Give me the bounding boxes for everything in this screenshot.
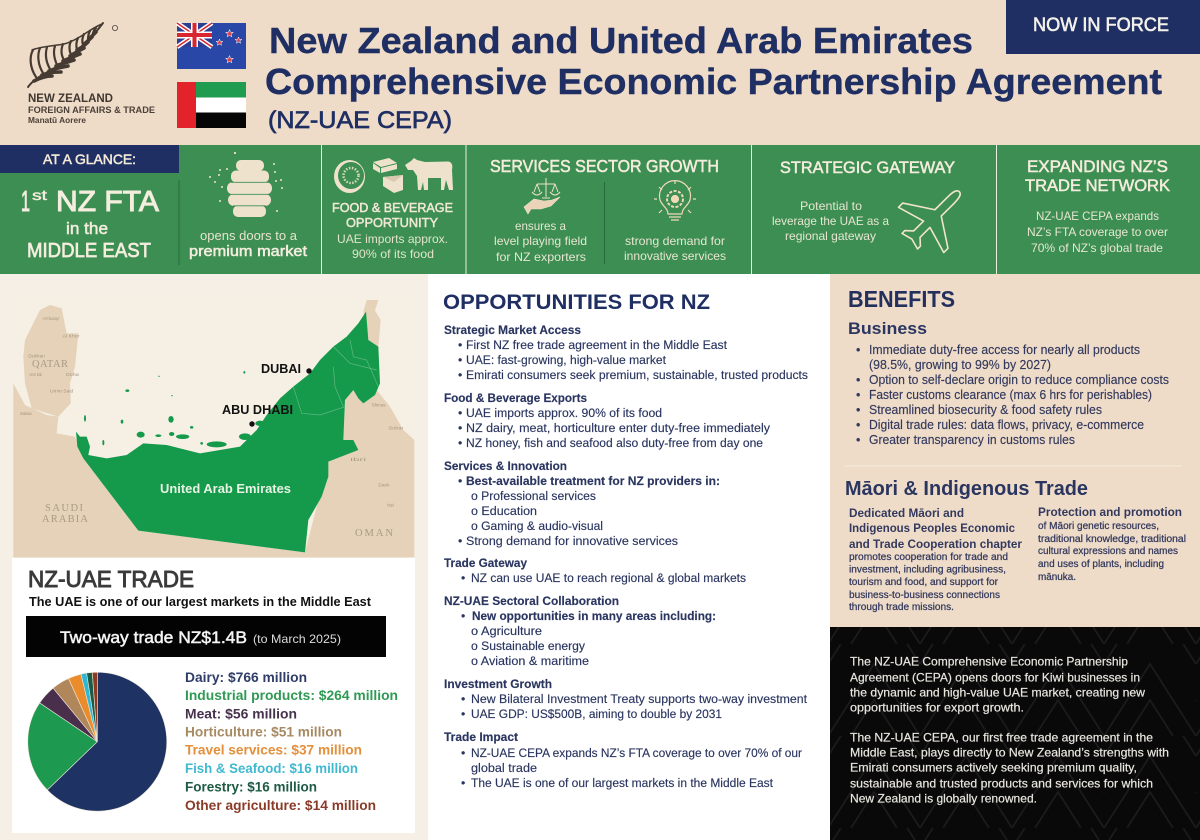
map of UAE: Umm Bab	[29, 372, 42, 378]
map of UAE: Dank	[378, 483, 390, 489]
list: business benefits: Option to self-declare origin to reduce compliance costs	[869, 373, 1169, 387]
country label: Saudi Arabia	[42, 503, 88, 525]
two-way trade figure	[26, 616, 386, 657]
section: investment growth: New Bilateral Investment Treaty supports two-way investment	[471, 692, 808, 706]
section: trade gateway: •	[461, 571, 465, 585]
city: Abu Dhabi: ABU DHABI	[222, 403, 293, 417]
heading: OPPORTUNITIES FOR NZ	[443, 290, 710, 314]
item: strategic gateway: STRATEGIC GATEWAY	[780, 158, 955, 177]
icon: cow	[405, 158, 453, 190]
text: dedicated chapter: Indigenous Peoples Economic	[849, 521, 1015, 535]
stat: 1st NZ FTA in the Middle East: MIDDLE EAST	[27, 240, 151, 262]
summary text: The NZ-UAE CEPA, our first free trade agreement in the	[850, 730, 1153, 744]
section: strategic market access: Emirati consumers seek premium, sustainable, trusted products	[466, 368, 808, 382]
item: expanding trade network: NZ’s FTA coverage to over	[1027, 225, 1168, 239]
icon: UAE flag	[177, 82, 246, 128]
list: business benefits: Greater transparency in customs rules	[869, 433, 1075, 447]
section: services and innovation: o Education	[471, 504, 537, 518]
subheading: The UAE is one of our largest markets in the Middle East	[29, 595, 372, 609]
item: services sector growth: SERVICES SECTOR GROWTH	[490, 156, 719, 176]
icon: kiwi fruit	[334, 160, 365, 193]
section: strategic market access: First NZ free trade agreement in the Middle East	[466, 338, 728, 352]
map of UAE: Shinas	[372, 403, 386, 409]
map of UAE: Dukhan	[28, 353, 45, 359]
section: sectoral collaboration: New opportunities in many areas including:	[472, 609, 716, 623]
logo: NZ Foreign Affairs & Trade: FOREIGN AFFAIRS & TRADE	[28, 105, 155, 116]
section: investment growth: UAE GDP: US$500B, aiming to double by 2031	[471, 707, 722, 721]
title: New Zealand and United Arab Emirates	[269, 20, 973, 61]
list: business benefits: Immediate duty-free access for nearly all products	[869, 343, 1140, 357]
two-way trade figure: (to March 2025)	[253, 632, 341, 646]
panel: benefits	[830, 274, 1200, 627]
chart legend: Industrial products: $264 million	[185, 687, 398, 703]
section: sectoral collaboration: o Sustainable energy	[471, 639, 586, 653]
item: expanding trade network: TRADE NETWORK	[1025, 176, 1171, 195]
section: trade gateway: Trade Gateway	[444, 556, 527, 570]
list: business benefits: •	[856, 433, 860, 447]
badge: now in force: NOW IN FORCE	[1033, 15, 1169, 36]
icon: light bulb with gear	[654, 181, 696, 220]
section: food and beverage exports: •	[458, 421, 462, 435]
country label: Qatar: QATAR	[32, 359, 68, 370]
section: services and innovation: o Gaming & audio-visual	[471, 519, 603, 533]
summary text: opportunities for export growth.	[850, 700, 1024, 714]
country label: Saudi Arabia: SAUDI	[45, 503, 84, 514]
section: trade impact: global trade	[471, 761, 537, 775]
item: expanding trade network: NZ-UAE CEPA expands	[1036, 209, 1159, 223]
list: business benefits: Digital trade rules: data flows, privacy, e-commerce	[869, 418, 1144, 432]
section: food and beverage exports: NZ honey, fish and seafood also duty-free from day one	[466, 436, 763, 450]
summary text: Agreement (CEPA) opens doors for Kiwi businesses in	[850, 670, 1140, 684]
item: services sector growth: ensures a	[515, 219, 566, 233]
icon: honey hive	[209, 152, 283, 217]
heading: NZ-UAE TRADE	[28, 566, 194, 592]
text: dedicated chapter: Dedicated Māori and	[849, 506, 964, 520]
chart legend: Horticulture: $51 million	[185, 724, 342, 740]
text: dedicated chapter: promotes cooperation for trade and	[849, 552, 1008, 563]
summary text: Emirati consumers actively seeking premium quality,	[850, 760, 1137, 774]
item: premium market	[189, 152, 307, 260]
two-way trade figure: Two-way trade NZ$1.4B	[60, 628, 247, 647]
item: services sector growth: for NZ exporters	[496, 250, 586, 264]
summary text: sustainable and trusted products and services for which	[850, 776, 1153, 790]
section: food and beverage exports: Food & Beverage Exports	[444, 391, 587, 405]
panel: opportunities for NZ	[428, 274, 830, 840]
map of UAE: Yanqul	[387, 503, 394, 509]
subheading: Maori and Indigenous trade: Māori & Indigenous Trade	[845, 478, 1088, 500]
section: trade gateway: NZ can use UAE to reach regional & global markets	[471, 571, 746, 585]
section: services and innovation: Services & Innovation	[444, 459, 567, 473]
section: food and beverage exports: •	[458, 436, 462, 450]
section: food and beverage exports: NZ dairy, meat, horticulture enter duty-free immediately	[466, 421, 771, 435]
item: food and beverage opportunity: UAE imports approx.	[337, 232, 448, 246]
list: business benefits: •	[856, 373, 860, 387]
list: business benefits: (98.5%, growing to 99% by 2027)	[869, 358, 1051, 372]
chart legend: Other agriculture: $14 million	[185, 797, 376, 813]
land: United Arab Emirates	[76, 312, 380, 552]
map of UAE: Doha	[66, 372, 79, 378]
list: business benefits	[856, 343, 1169, 447]
text: protection and promotion: mānuka.	[1038, 572, 1076, 583]
section: trade impact: •	[461, 776, 465, 790]
text: protection and promotion	[1038, 505, 1186, 583]
icon: cheese wedge	[383, 175, 403, 193]
section: strategic market access: Strategic Market Access	[444, 323, 581, 337]
map of UAE: Al Khuwayr	[43, 316, 60, 322]
item: services sector growth: level playing field	[494, 234, 587, 248]
section: services and innovation: Best-available treatment for NZ providers in:	[466, 474, 720, 488]
title	[265, 20, 1162, 134]
section: food and beverage exports	[444, 391, 771, 450]
item: food and beverage opportunity: OPPORTUNITY	[346, 215, 438, 230]
item: services sector growth: innovative services	[624, 249, 726, 263]
list: business benefits: •	[856, 403, 860, 417]
text: dedicated chapter	[849, 506, 1022, 613]
city: Abu Dhabi	[222, 403, 293, 427]
stat: 1st NZ FTA in the Middle East: NZ FTA	[56, 186, 160, 218]
item: premium market: premium market	[189, 244, 307, 260]
item: strategic gateway: regional gateway	[785, 229, 876, 243]
summary text: New Zealand is globally renowned.	[850, 792, 1037, 806]
map of UAE: Salwa	[20, 411, 32, 417]
section: trade impact: The UAE is one of our largest markets in the Middle East	[471, 776, 774, 790]
stat: 1st NZ FTA in the Middle East: in the	[66, 219, 108, 238]
list: business benefits: •	[856, 343, 860, 357]
section: strategic market access: UAE: fast-growing, high-value market	[466, 353, 667, 367]
pie chart: export sectors	[28, 672, 167, 811]
chart legend: Fish & Seafood: $16 million	[185, 760, 358, 776]
item: expanding trade network	[1025, 157, 1171, 255]
section: sectoral collaboration: o Aviation & maritime	[471, 654, 589, 668]
list: business benefits: Streamlined biosecurity & food safety rules	[869, 403, 1102, 417]
item: services sector growth: strong demand for	[625, 234, 725, 248]
logo: NZ Foreign Affairs & Trade: NEW ZEALAND	[28, 93, 113, 105]
summary text: the dynamic and high-value UAE market, creating new	[850, 686, 1145, 700]
stat: 1st NZ FTA in the Middle East: 1	[21, 186, 30, 218]
summary text: Middle East, plays directly to New Zealand’s strengths with	[850, 746, 1169, 760]
section: services and innovation: •	[458, 534, 462, 548]
summary text: The NZ-UAE Comprehensive Economic Partnership	[850, 654, 1128, 668]
chart legend: Travel services: $37 million	[185, 742, 362, 758]
heading: BENEFITS	[848, 286, 955, 312]
item: food and beverage opportunity	[332, 158, 453, 261]
title: (NZ-UAE CEPA)	[268, 107, 452, 134]
text: dedicated chapter: and Trade Cooperation chapter	[849, 537, 1022, 551]
text: protection and promotion: Protection and promotion	[1038, 505, 1182, 519]
chart legend: Dairy: $766 million	[185, 669, 307, 685]
map label: United Arab Emirates: United Arab Emirates	[160, 482, 291, 496]
map of UAE: Ibri	[350, 457, 366, 463]
badge: now in force	[1006, 0, 1200, 54]
country label: Saudi Arabia: ARABIA	[42, 514, 88, 525]
land: surrounding countries	[13, 300, 414, 557]
section: services and innovation: o Professional services	[471, 489, 596, 503]
section: food and beverage exports: UAE imports approx. 90% of its food	[466, 406, 662, 420]
section: trade impact: NZ-UAE CEPA expands NZ’s FTA coverage to over 70% of our	[471, 746, 802, 760]
section: trade impact: Trade Impact	[444, 730, 518, 744]
section: sectoral collaboration: o Agriculture	[471, 624, 542, 638]
at a glance heading: AT A GLANCE:	[43, 151, 136, 167]
icon: New Zealand flag	[177, 23, 246, 69]
item: premium market: opens doors to a	[200, 228, 298, 243]
title: Comprehensive Economic Partnership Agreement	[265, 61, 1162, 102]
section: strategic market access: •	[458, 368, 462, 382]
header band	[0, 0, 1200, 145]
map of UAE: Al Khor	[63, 333, 80, 339]
item: expanding trade network: 70% of NZ’s global trade	[1031, 241, 1163, 255]
section: investment growth	[444, 677, 808, 721]
logo: NZ Foreign Affairs & Trade	[28, 23, 155, 125]
item: strategic gateway: leverage the UAE as a	[772, 214, 889, 228]
text: dedicated chapter: tourism and food, and support for	[849, 577, 999, 588]
summary text	[850, 654, 1169, 806]
map of UAE: Sohar	[388, 425, 404, 431]
logo: NZ Foreign Affairs & Trade: Manatū Aorere	[28, 116, 87, 125]
section: sectoral collaboration: NZ-UAE Sectoral Collaboration	[444, 594, 619, 608]
icon: scales in hand	[524, 178, 560, 214]
city: Dubai: DUBAI	[261, 362, 301, 376]
panel: summary on black	[830, 627, 1200, 840]
text: dedicated chapter: through trade missions.	[849, 602, 954, 613]
chart legend: Forestry: $16 million	[185, 778, 317, 794]
at a glance heading	[0, 145, 179, 173]
list: business benefits: •	[856, 418, 860, 432]
text: protection and promotion: traditional knowledge, traditional	[1038, 534, 1186, 545]
item: expanding trade network: EXPANDING NZ’S	[1027, 157, 1168, 176]
stat: 1st NZ FTA in the Middle East	[21, 186, 160, 262]
section: sectoral collaboration	[444, 594, 716, 668]
map of UAE: Umm Said	[50, 388, 74, 394]
map of UAE	[13, 294, 415, 558]
section: services and innovation: •	[458, 474, 462, 488]
country label: Oman: OMAN	[355, 528, 393, 539]
icon: butter box	[373, 158, 397, 173]
stat: 1st NZ FTA in the Middle East: st	[32, 187, 47, 203]
list: business benefits: Faster customs clearance (max 6 hrs for perishables)	[869, 388, 1152, 402]
chart legend: Meat: $56 million	[185, 706, 297, 722]
subheading: business: Business	[848, 319, 927, 338]
panel: NZ-UAE trade	[12, 558, 415, 833]
section: services and innovation: Strong demand for innovative services	[466, 534, 678, 548]
section: trade impact: •	[461, 746, 465, 760]
text: protection and promotion: of Māori genetic resources,	[1038, 521, 1159, 532]
section: sectoral collaboration: •	[461, 609, 465, 623]
item: food and beverage opportunity: 90% of its food	[352, 247, 434, 261]
item: strategic gateway	[772, 158, 982, 264]
section: food and beverage exports: •	[458, 406, 462, 420]
text: dedicated chapter: business-to-business connections	[849, 590, 1000, 601]
section: trade gateway	[444, 556, 746, 585]
text: dedicated chapter: investment, including agribusiness,	[849, 564, 1006, 576]
section: investment growth: Investment Growth	[444, 677, 552, 691]
section: strategic market access: •	[458, 338, 462, 352]
at a glance band	[0, 145, 1200, 274]
section: trade impact	[444, 730, 802, 790]
section: strategic market access: •	[458, 353, 462, 367]
section: investment growth: •	[461, 707, 465, 721]
item: services sector growth	[490, 156, 726, 264]
icon: airplane	[887, 169, 982, 264]
section: investment growth: •	[461, 692, 465, 706]
list: business benefits: •	[856, 388, 860, 402]
chart legend	[185, 669, 398, 813]
item: strategic gateway: Potential to	[800, 199, 862, 213]
section: strategic market access	[444, 323, 808, 382]
text: protection and promotion: cultural expressions and names	[1038, 546, 1178, 557]
section: services and innovation	[444, 459, 720, 548]
item: food and beverage opportunity: FOOD & BEVERAGE	[332, 200, 453, 215]
text: protection and promotion: and uses of plants, including	[1038, 559, 1164, 570]
